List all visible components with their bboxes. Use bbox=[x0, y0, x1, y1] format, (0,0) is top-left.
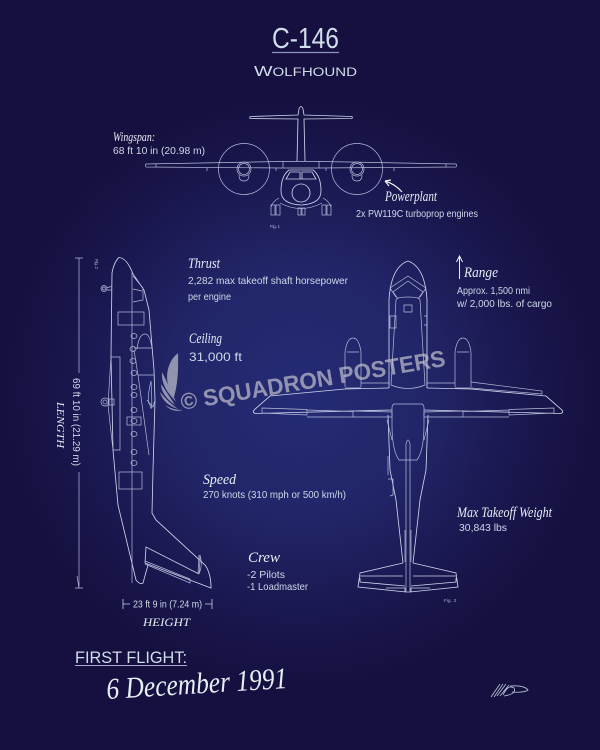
text block: wingspan bbox=[113, 129, 205, 157]
text block: max takeoff weight: Max Takeoff Weight bbox=[456, 505, 553, 521]
landing gear bbox=[271, 198, 331, 215]
subtitle: Wolfhound: W OLFHOUND bbox=[254, 63, 357, 80]
text block: ceiling bbox=[189, 331, 243, 364]
text block: range bbox=[456, 265, 552, 310]
text block: crew bbox=[247, 550, 308, 593]
text block: speed: 270 knots (310 mph or 500 km/h) bbox=[203, 489, 346, 501]
horizontal tail bbox=[358, 563, 458, 592]
nacelle left bbox=[345, 338, 361, 388]
fuselage outline bbox=[388, 261, 428, 563]
text block: wingspan: Wingspan: bbox=[113, 129, 155, 144]
text block: crew: -1 Loadmaster bbox=[247, 581, 308, 593]
text block: max takeoff weight: 30,843 lbs bbox=[459, 522, 507, 534]
fuselage bbox=[281, 170, 321, 205]
figure labels bbox=[94, 224, 456, 603]
icon: winged logo bbox=[160, 353, 183, 411]
prop edge-on bbox=[147, 381, 155, 408]
wing fairing bbox=[134, 334, 154, 455]
fin centerline bbox=[405, 440, 411, 592]
arrow: powerplant pointer bbox=[385, 180, 402, 192]
text block: thrust bbox=[188, 256, 348, 303]
text block: thrust: per engine bbox=[188, 291, 231, 303]
figure labels: Fig. 2 bbox=[94, 259, 99, 269]
tail details bbox=[145, 555, 201, 583]
wing bbox=[146, 161, 456, 168]
title: C-146: C-146 bbox=[272, 23, 339, 55]
underwing pods bbox=[207, 168, 394, 171]
dimension: height: HEIGHT bbox=[142, 615, 191, 629]
wing flaps and ailerons bbox=[262, 382, 554, 417]
top view aircraft drawing bbox=[253, 261, 563, 592]
date: 6 December 1991: 6 December 1991 bbox=[105, 662, 288, 706]
dimension: length: LENGTH bbox=[54, 401, 66, 449]
text block: crew: Crew bbox=[248, 550, 280, 566]
cargo and crew door rectangles bbox=[118, 312, 144, 489]
text block: wingspan: 68 ft 10 in (20.98 m) bbox=[113, 145, 205, 157]
signature bbox=[491, 684, 528, 697]
text block: thrust: Thrust bbox=[188, 256, 221, 272]
text block: ceiling: 31,000 ft bbox=[189, 350, 243, 364]
side view aircraft drawing bbox=[101, 258, 211, 588]
centerline bbox=[131, 272, 133, 583]
dimension: height: 23 ft 9 in (7.24 m) bbox=[133, 600, 202, 610]
propeller discs bbox=[218, 144, 382, 194]
cockpit bbox=[390, 276, 427, 388]
icon: copyright mark and wordmark: © SQUADRON POSTERS bbox=[179, 345, 447, 415]
figure labels: Fig. 3 bbox=[444, 598, 456, 603]
dimension: length: 69 ft 10 in (21.29 m) bbox=[70, 378, 82, 466]
window row bbox=[130, 334, 137, 466]
cockpit windows bbox=[133, 276, 143, 302]
heading: first flight: FIRST FLIGHT: bbox=[75, 649, 187, 667]
text block: range: w/ 2,000 lbs. of cargo bbox=[456, 298, 552, 310]
text block: powerplant: Powerplant bbox=[384, 189, 438, 205]
tail fin and stabilizer bbox=[250, 106, 352, 161]
engine nacelle bbox=[108, 357, 120, 450]
engine nacelles bbox=[237, 162, 364, 181]
dimension: length bbox=[54, 258, 83, 588]
nose probe bbox=[101, 286, 112, 292]
centre wing box bbox=[392, 404, 424, 460]
text block: max takeoff weight bbox=[456, 505, 553, 534]
nacelle right bbox=[455, 338, 471, 388]
main wing bbox=[253, 388, 563, 414]
text block: ceiling: Ceiling bbox=[189, 331, 222, 347]
arrow: range bbox=[456, 256, 462, 279]
text block: crew: -2 Pilots bbox=[247, 569, 285, 581]
dimension: height bbox=[123, 599, 212, 629]
text block: thrust: 2,282 max takeoff shaft horsepower bbox=[188, 275, 348, 287]
figure labels: Fig. 1 bbox=[270, 224, 280, 229]
door and window details bbox=[387, 420, 429, 496]
text block: speed bbox=[203, 472, 346, 501]
text block: range: Approx. 1,500 nmi bbox=[457, 285, 530, 297]
front view aircraft drawing bbox=[146, 106, 456, 215]
watermark: Squadron Posters bbox=[160, 345, 447, 415]
text block: range: Range bbox=[463, 265, 498, 281]
text block: powerplant: 2x PW119C turboprop engines bbox=[356, 208, 478, 220]
fuselage and tail outline bbox=[111, 258, 211, 588]
propeller hub bbox=[101, 398, 114, 406]
text block: powerplant bbox=[356, 189, 478, 220]
text block: speed: Speed bbox=[203, 472, 236, 488]
